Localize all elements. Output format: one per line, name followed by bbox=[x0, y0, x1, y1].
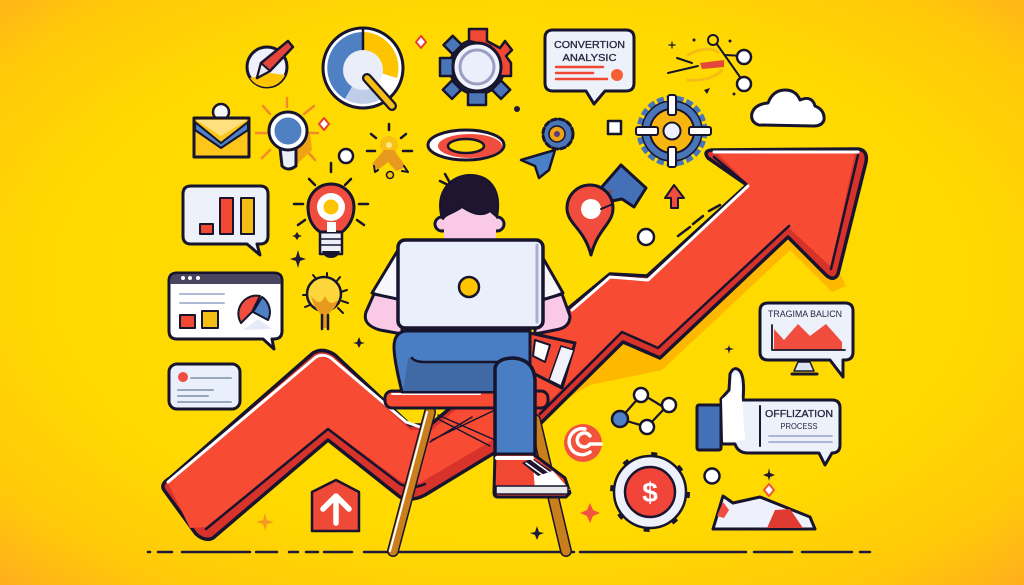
icon: target gear bbox=[636, 95, 711, 167]
icon: white dot right bbox=[638, 229, 654, 245]
stool bbox=[385, 391, 566, 551]
icon: light bulb bbox=[294, 163, 368, 258]
icon: dollar gear bbox=[612, 454, 688, 530]
left shirt sleeve bbox=[372, 250, 398, 302]
dollar sign: $ bbox=[642, 477, 658, 508]
laptop bbox=[398, 240, 543, 328]
icon: cloud bbox=[752, 90, 824, 126]
icon: yellow glowing bulb bbox=[367, 124, 412, 178]
ground line bbox=[148, 551, 870, 553]
right arm bbox=[535, 294, 570, 334]
rising red arrow bbox=[163, 149, 866, 539]
arrow body bbox=[163, 149, 866, 539]
icon: envelope bbox=[194, 104, 249, 157]
arrow highlight bbox=[168, 152, 858, 482]
icon: red sparkles bbox=[256, 484, 774, 531]
icon: thumbs up process bubble: OFFLIZATION bbox=[765, 408, 833, 420]
arrow inner edge line bbox=[206, 155, 858, 529]
right shirt sleeve bbox=[540, 258, 563, 302]
icon: square bbox=[608, 121, 621, 134]
stool braces bbox=[430, 410, 495, 446]
left arm bbox=[365, 294, 402, 334]
icon: thumbs up process bubble bbox=[697, 369, 840, 465]
stool seat bbox=[385, 391, 548, 408]
stool legs bbox=[393, 412, 566, 551]
icon: small sparkles bbox=[290, 92, 775, 540]
icon: small up arrow bbox=[665, 185, 684, 208]
icon: sneaker bbox=[713, 496, 815, 529]
icon: message card bbox=[169, 364, 240, 409]
icon: white dot lower bbox=[704, 468, 720, 484]
ears and neck bbox=[435, 200, 504, 245]
person bbox=[365, 174, 575, 497]
back foot shoe bbox=[527, 333, 575, 388]
arrow face bbox=[168, 153, 855, 528]
icon: red house arrow bbox=[312, 480, 359, 531]
icon: pencil badge bbox=[247, 41, 293, 87]
laptop logo bbox=[459, 277, 479, 297]
hair tuft bbox=[440, 174, 450, 185]
icon: conversion analysis bubble: ANALYSIC bbox=[562, 53, 616, 64]
icon: thumbs up process bubble: PROCESS bbox=[780, 422, 818, 431]
icon: target ring bbox=[428, 130, 504, 160]
icon: blue gear bbox=[440, 29, 512, 105]
jeans shadow bbox=[403, 357, 497, 391]
icon: network nodes bbox=[668, 35, 751, 94]
icon: browser window chart bbox=[169, 273, 282, 349]
jeans bbox=[394, 331, 530, 392]
icon: monitor chart: TRAGIMA BALICN bbox=[768, 309, 842, 319]
icon: red swirl bbox=[564, 424, 602, 462]
icon: map pin with tag bbox=[567, 165, 646, 255]
icon: small bulb bbox=[303, 273, 348, 329]
icon: bar chart bubble bbox=[183, 186, 268, 255]
arrow dashes bbox=[678, 205, 720, 236]
icon: conversion analysis bubble: CONVERTION bbox=[554, 40, 625, 51]
icon: molecule bbox=[612, 388, 676, 434]
front leg bbox=[495, 358, 535, 456]
hair bbox=[440, 175, 498, 219]
icon: conversion analysis bubble bbox=[545, 30, 634, 104]
icon: red sparkle bbox=[319, 118, 329, 130]
icon: small gear with cursor bbox=[521, 119, 573, 178]
icon: sparkle bbox=[416, 36, 426, 48]
icon: donut dial bbox=[323, 28, 403, 108]
arrow shadow bbox=[530, 228, 846, 420]
icon: magnifier bbox=[256, 98, 318, 169]
front shoe bbox=[494, 454, 570, 497]
icon: monitor chart bbox=[760, 303, 853, 377]
icon: white dot bbox=[339, 149, 353, 163]
